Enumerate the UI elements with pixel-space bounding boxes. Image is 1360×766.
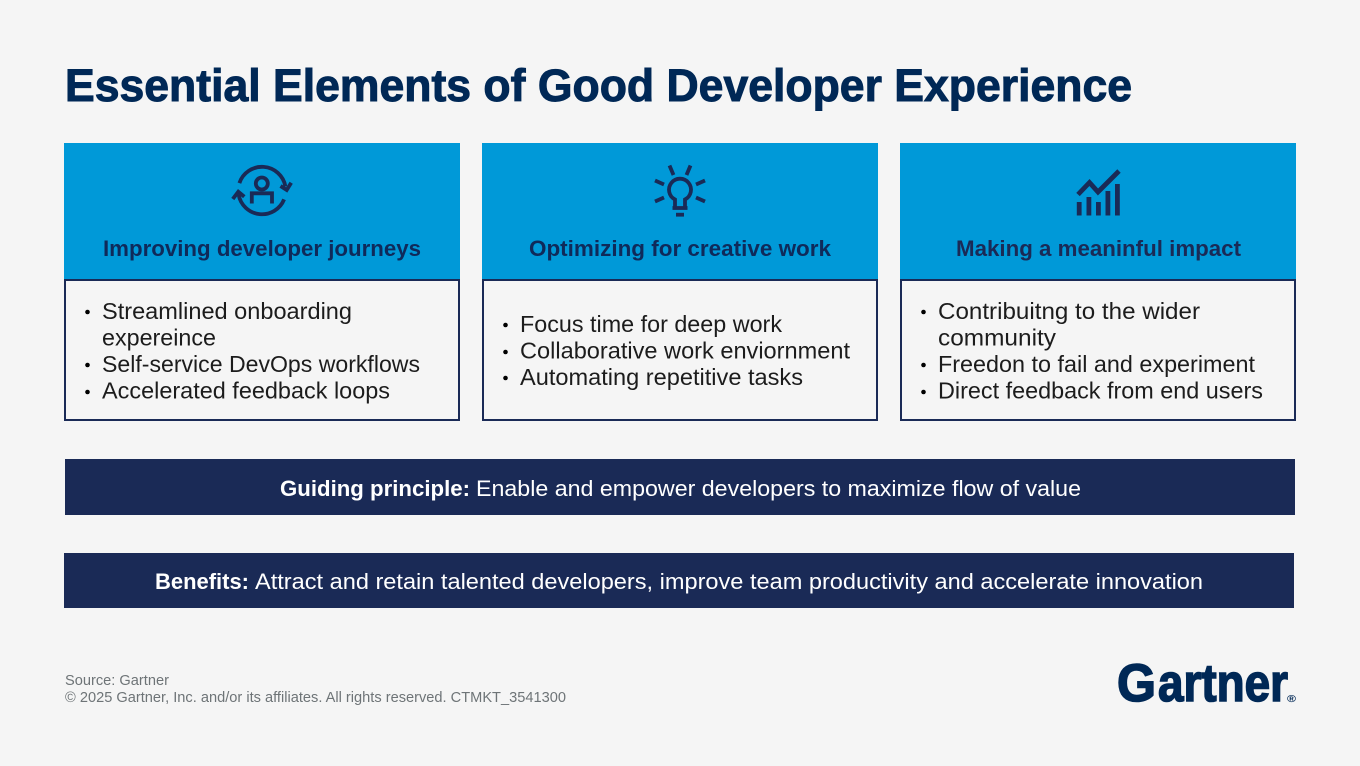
bullet list: Self-service DevOps workflows [102,351,420,377]
banner: guiding principle: Enable and empower developers to maximize flow of value [476,476,1081,501]
bullet list [503,311,851,390]
icon: person in cycle [233,167,291,214]
panel header [482,143,878,280]
panel body [65,280,459,420]
heading: Optimizing for creative work [529,236,832,261]
bullet list: Freedon to fail and experiment [938,351,1256,377]
Gartner logo: artner [1158,654,1288,713]
bullet list [921,298,1263,404]
panel: optimizing for creative work [482,143,878,420]
Gartner logo: ® [1287,694,1297,705]
bullet list: Contribuitng to the wider [938,298,1200,324]
Gartner logo: G [1117,654,1156,713]
heading: Making a meaninful impact [956,236,1242,261]
title: Essential Elements of Good Developer Experience [65,60,1132,111]
icon: growth chart [1077,171,1120,216]
banner: benefits: Benefits: [155,569,249,594]
bullet list: Focus time for deep work [520,311,782,337]
source and copyright footer [65,673,566,706]
icon: light bulb [655,166,705,215]
bullet list: Accelerated feedback loops [102,378,390,404]
panel header [900,143,1296,280]
bullet list: expereince [102,324,216,350]
source and copyright footer: Source: Gartner [65,673,169,689]
panel: improving developer journeys [64,143,460,420]
banner: guiding principle: Guiding principle: [280,476,470,501]
bullet list: Collaborative work enviornment [520,338,851,364]
banner: benefits: Attract and retain talented developers, improve team productivity and accelerate innovation [255,569,1203,594]
bullet list [85,298,420,404]
panel body [901,280,1295,420]
heading: Improving developer journeys [103,236,421,261]
bullet list: community [938,324,1057,350]
bullet list: Automating repetitive tasks [520,364,803,390]
panel header [64,143,460,280]
banner: benefits [64,553,1294,608]
bullet list: Streamlined onboarding [102,298,352,324]
banner: guiding principle [65,459,1295,515]
panel body [483,280,877,420]
bullet list: Direct feedback from end users [938,378,1263,404]
panel: making a meaningful impact [900,143,1296,420]
source and copyright footer: © 2025 Gartner, Inc. and/or its affiliates. All rights reserved. CTMKT_3541300 [65,690,566,706]
